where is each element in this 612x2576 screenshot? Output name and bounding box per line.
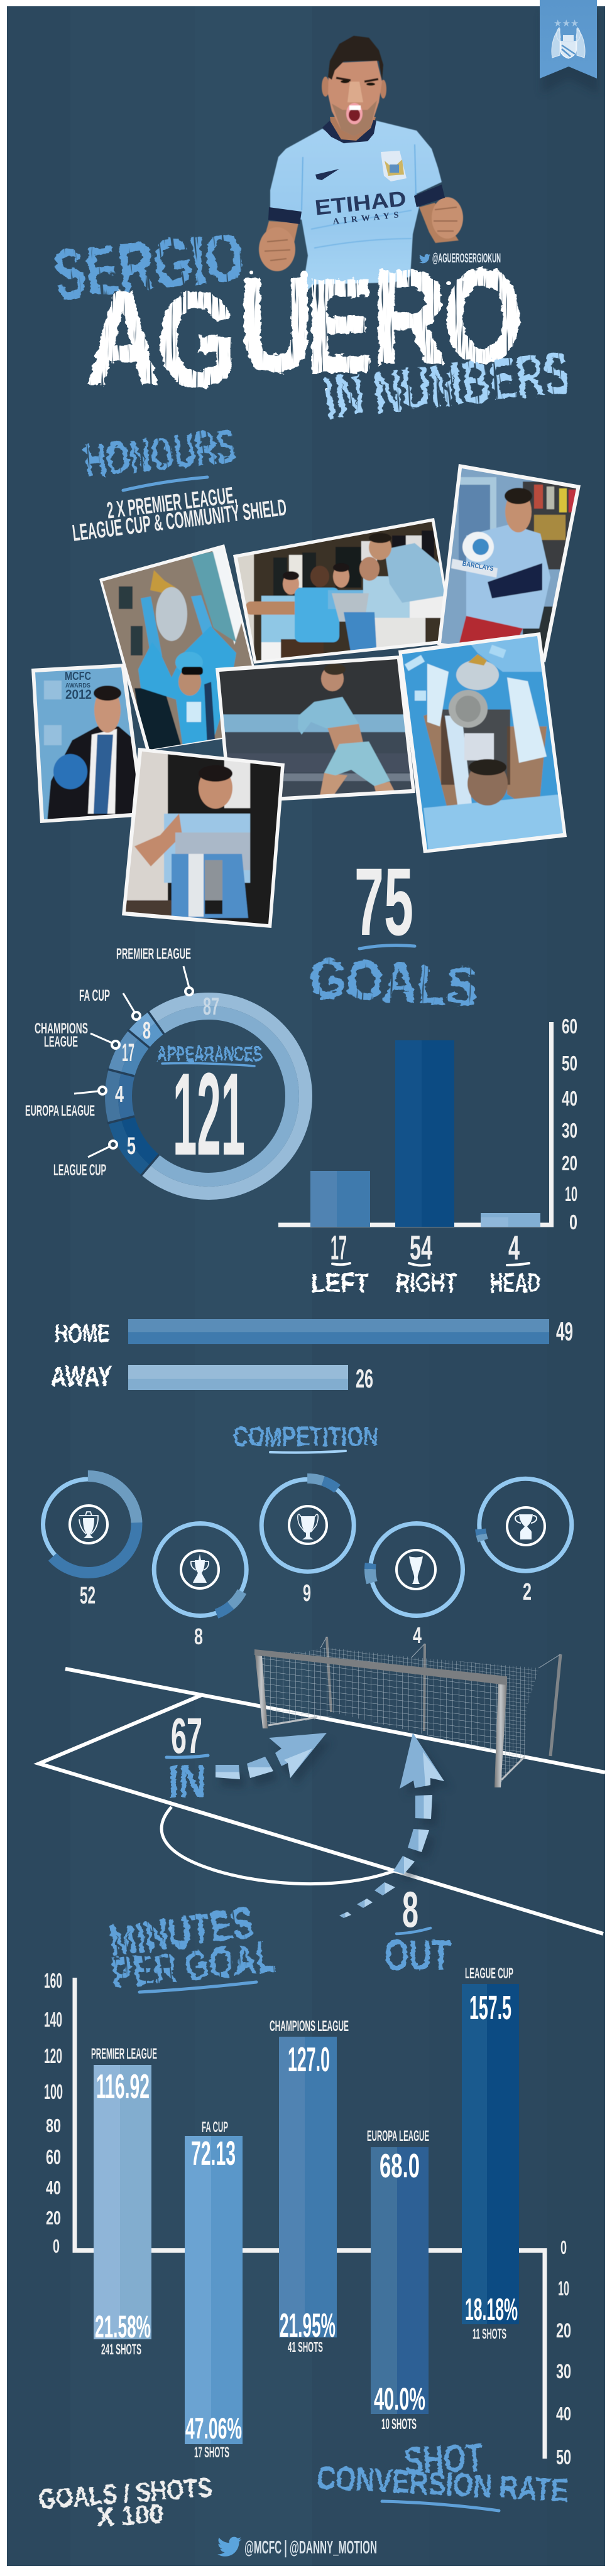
- ring: league cup goals: [479, 1479, 572, 1605]
- right axis labels: 30: [556, 2360, 571, 2383]
- left axis labels: 20: [46, 2207, 61, 2229]
- icon: premier league trophy: [83, 1518, 94, 1538]
- right axis labels: 20: [556, 2319, 571, 2342]
- bar: europa league: 40.0%: [374, 2381, 425, 2417]
- arrow head: [269, 1733, 327, 1778]
- category labels: LEAGUE CUP: [53, 1161, 106, 1179]
- axis labels: 40: [562, 1087, 577, 1110]
- icon: right fist and forearm: [419, 197, 463, 243]
- value: header: HEAD: [490, 1268, 540, 1298]
- bar: fa cup: 17 SHOTS: [194, 2444, 229, 2461]
- axis labels: 30: [562, 1119, 577, 1142]
- bar: away goals: AWAY: [51, 1360, 112, 1393]
- value: 67 in: IN: [168, 1755, 206, 1808]
- text: @AGUEROSERGIOKUN: [432, 251, 501, 266]
- category labels: PREMIER LEAGUE: [116, 946, 191, 962]
- left axis labels: 40: [46, 2177, 61, 2199]
- arrow: goals from outside the box: [339, 1733, 451, 1980]
- player neck: [330, 117, 376, 142]
- icon: europa league trophy: [409, 1556, 423, 1584]
- bar: champions league: 127.0: [288, 2040, 330, 2079]
- arrow head: [400, 1733, 444, 1789]
- shirt sponsor text: ETIHAD: [314, 187, 407, 220]
- heading: competition: COMPETITION: [233, 1421, 378, 1452]
- ring: europa league segment: [112, 1000, 305, 1193]
- bar: europa league: [367, 2128, 429, 2433]
- icon: twitter bird: [217, 2537, 241, 2557]
- value: right foot: RIGHT: [396, 1268, 457, 1298]
- icon: champions league handles: [298, 1514, 318, 1532]
- goal net: [259, 1647, 539, 1786]
- bar: league cup: LEAGUE CUP: [465, 1965, 513, 1982]
- icon: league cup trophy: [519, 1514, 533, 1539]
- goals total: GOALS: [308, 947, 479, 1018]
- centre: appearances total: APPEARANCES: [157, 1042, 262, 1066]
- value: 4: 4: [413, 1622, 422, 1648]
- title: Aguero: AGUERO: [86, 243, 523, 414]
- axis lines: [75, 1978, 545, 2459]
- bar: league cup: [462, 1965, 519, 2342]
- sleeve cuffs: [268, 185, 445, 224]
- axis labels: 60: [562, 1015, 577, 1038]
- donut chart: appearances: 121: [173, 1048, 245, 1180]
- ring: league cup segment: [112, 1000, 305, 1193]
- left axis labels: 140: [44, 2008, 62, 2031]
- photo: dressing room: [232, 515, 459, 666]
- arrow shadow: [400, 1740, 451, 1882]
- value labels on ring: 17: [122, 1039, 134, 1067]
- ring: champions league segment: [112, 1000, 305, 1193]
- value: 52: 52: [80, 1582, 96, 1609]
- right axis labels: 0: [560, 2236, 567, 2258]
- shirt sponsor subline: AIRWAYS: [332, 210, 399, 227]
- photo: awards evening: MCFC: [65, 670, 91, 682]
- ring: fa cup goals: [153, 1522, 248, 1649]
- title: Sergio: SERGIO: [49, 218, 248, 315]
- bar: fa cup: FA CUP: [202, 2119, 228, 2136]
- value: 67 in: 67: [171, 1708, 202, 1764]
- value: right foot: [396, 1228, 457, 1298]
- shirt crest: [381, 151, 407, 181]
- ring: fa cup segment: [112, 1000, 305, 1193]
- left axis labels: 100: [44, 2080, 63, 2103]
- value: 9: 9: [303, 1580, 311, 1607]
- dual chart: minutes per goal and shot conversion: PREMIER LEAGUE: [91, 2045, 157, 2062]
- bar chart: goals by body part: [278, 1015, 577, 1298]
- photo: cup with thumbs up: [122, 744, 285, 929]
- category labels: LEAGUE: [44, 1033, 78, 1050]
- left axis labels: 0: [53, 2235, 60, 2257]
- axis labels: 50: [562, 1052, 577, 1075]
- footer credits: @MCFC | @DANNY_MOTION: [244, 2538, 377, 2558]
- arrow shadow: [221, 1742, 332, 1788]
- text: honours list: 2 X PREMIER LEAGUE,: [106, 482, 238, 524]
- formula note: X 100: [96, 2498, 164, 2533]
- ring: premier league goals: [40, 1476, 137, 1609]
- photo: barclays award: BARCLAYS: [462, 560, 494, 573]
- value: 8 out: [385, 1882, 451, 1980]
- right axis labels: 50: [556, 2445, 571, 2469]
- goal back stanchions: [320, 1637, 560, 1756]
- value: 2: 2: [523, 1579, 532, 1605]
- twitter handle: [419, 251, 501, 266]
- value: left foot: LEFT: [311, 1268, 369, 1298]
- icon: fa cup trophy: [193, 1554, 207, 1583]
- photo: trophy lift: [396, 628, 572, 857]
- value labels on ring: 5: [127, 1133, 136, 1160]
- bar: europa league: 68.0: [380, 2147, 420, 2185]
- value: 8 out: OUT: [385, 1931, 451, 1980]
- bar: champions league: 41 SHOTS: [288, 2339, 323, 2355]
- axis labels: 10: [565, 1182, 577, 1205]
- bar: home goals: [55, 1317, 573, 1348]
- bar: head: [481, 1213, 540, 1227]
- goals total: 75: [354, 848, 413, 956]
- photo: premier league parade: [99, 544, 254, 750]
- value: 67 in: [167, 1708, 208, 1808]
- text: honours list: [68, 476, 288, 546]
- footer credits: [217, 2537, 377, 2558]
- arrow dashes: [216, 1757, 273, 1779]
- photo: awards evening: [31, 664, 137, 823]
- heading: shot conversion rate: [316, 2436, 569, 2511]
- bar: league cup: 18.18%: [465, 2293, 518, 2327]
- icon: champions league trophy: [301, 1516, 315, 1539]
- icon: fa cup handles: [191, 1561, 209, 1570]
- axis labels: 0: [569, 1210, 577, 1234]
- bar: champions league: [270, 2018, 349, 2355]
- goal with net: [254, 1637, 560, 1787]
- bar: league cup: 11 SHOTS: [473, 2325, 506, 2342]
- ring: premier league segment: [112, 1000, 305, 1193]
- left axis labels: 60: [46, 2145, 61, 2169]
- right axis labels: 10: [558, 2277, 569, 2300]
- formula note: GOALS / SHOTS: [38, 2472, 213, 2515]
- centre: appearances total: [157, 1042, 262, 1180]
- donut chart: appearances: [25, 946, 305, 1193]
- goals total: [308, 848, 479, 1018]
- bar: europa league: 10 SHOTS: [381, 2416, 417, 2433]
- head: [322, 36, 386, 136]
- category labels: [25, 946, 191, 1179]
- left axis labels: 120: [44, 2044, 62, 2067]
- bar: league cup: 157.5: [469, 1989, 511, 2027]
- dual chart: minutes per goal and shot conversion: CHAMPIONS LEAGUE: [270, 2018, 349, 2035]
- shirt swoosh: [315, 169, 339, 180]
- leader lines: [74, 966, 193, 1157]
- arrow dashes: [339, 1795, 432, 1918]
- bar: premier league: 21.58%: [95, 2309, 151, 2344]
- value: header: [490, 1228, 540, 1298]
- left axis labels: 160: [44, 1969, 62, 1992]
- collar: [322, 120, 376, 143]
- value: left foot: [311, 1228, 369, 1298]
- left axis labels: [44, 1969, 63, 2257]
- bar: away goals: [51, 1360, 373, 1393]
- heading: minutes per goal: PER GOAL: [109, 1934, 278, 1997]
- category labels: EUROPA LEAGUE: [25, 1102, 95, 1119]
- bar: fa cup: 72.13: [191, 2135, 236, 2172]
- player portrait: [259, 36, 463, 295]
- photo: goal celebration: [214, 653, 421, 807]
- bar: left: [310, 1171, 370, 1227]
- value labels on ring: 8: [143, 1018, 151, 1044]
- heading: minutes per goal: MINUTES: [107, 1899, 256, 1966]
- right axis labels: 40: [556, 2403, 571, 2425]
- value labels on ring: 87: [203, 993, 219, 1020]
- value labels on ring: [115, 993, 219, 1160]
- value: 8 out: 8: [402, 1882, 418, 1938]
- pitch markings: [39, 1669, 605, 1934]
- formula note: [38, 2472, 213, 2533]
- left axis labels: 80: [46, 2115, 61, 2137]
- ring: europa league goals: [370, 1523, 463, 1648]
- bar: home goals: HOME: [55, 1318, 110, 1348]
- value: left foot: 17: [331, 1228, 347, 1267]
- bar: right: [395, 1040, 454, 1227]
- ring: champions league goals: [261, 1479, 355, 1607]
- icon: trophy crown and handles: [79, 1512, 98, 1534]
- bar: fa cup: 47.06%: [185, 2412, 242, 2445]
- value: 8: 8: [194, 1624, 203, 1649]
- dual chart: minutes per goal and shot conversion: EUROPA LEAGUE: [367, 2128, 429, 2145]
- goal frame: [254, 1649, 525, 1787]
- axis labels: [562, 1015, 577, 1234]
- bar: home goals: 49: [556, 1317, 573, 1346]
- bar: away goals: 26: [356, 1364, 373, 1393]
- ribbon with club crest: [540, 0, 598, 94]
- text: honours list: LEAGUE CUP & COMMUNITY SHIELD: [71, 494, 288, 546]
- icon: left fist and forearm: [259, 221, 298, 271]
- photo: awards evening: AWARDS: [65, 682, 90, 689]
- category labels: CHAMPIONS: [35, 1020, 88, 1037]
- heading: honours: [82, 420, 239, 490]
- bar: fa cup: [185, 2119, 243, 2461]
- arrow: goals from inside the box: [167, 1708, 332, 1808]
- photo: awards evening: 2012: [65, 687, 92, 702]
- right axis labels: [556, 2236, 571, 2469]
- player shirt: [270, 121, 442, 295]
- icon: league cup handles: [515, 1516, 537, 1523]
- value: header: 4: [508, 1228, 520, 1267]
- dual chart: minutes per goal and shot conversion: [44, 1965, 571, 2469]
- bar: premier league: 241 SHOTS: [101, 2341, 141, 2358]
- axis labels: 20: [562, 1151, 577, 1175]
- icon: twitter bird: [419, 254, 430, 263]
- photo: barclays award: [434, 461, 584, 666]
- heading: shot conversion rate: SHOT: [403, 2436, 484, 2483]
- value labels on ring: 4: [115, 1081, 124, 1107]
- heading: honours: HONOURS: [82, 420, 239, 487]
- bar: premier league: [91, 2045, 157, 2358]
- category labels: FA CUP: [79, 987, 110, 1005]
- bar: premier league: 116.92: [96, 2067, 150, 2106]
- value: right foot: 54: [410, 1228, 432, 1267]
- axis: [278, 1022, 552, 1225]
- heading: minutes per goal: [107, 1899, 278, 1997]
- ribbon with club crest: ★★★: [554, 18, 579, 29]
- bar: champions league: 21.95%: [280, 2307, 336, 2344]
